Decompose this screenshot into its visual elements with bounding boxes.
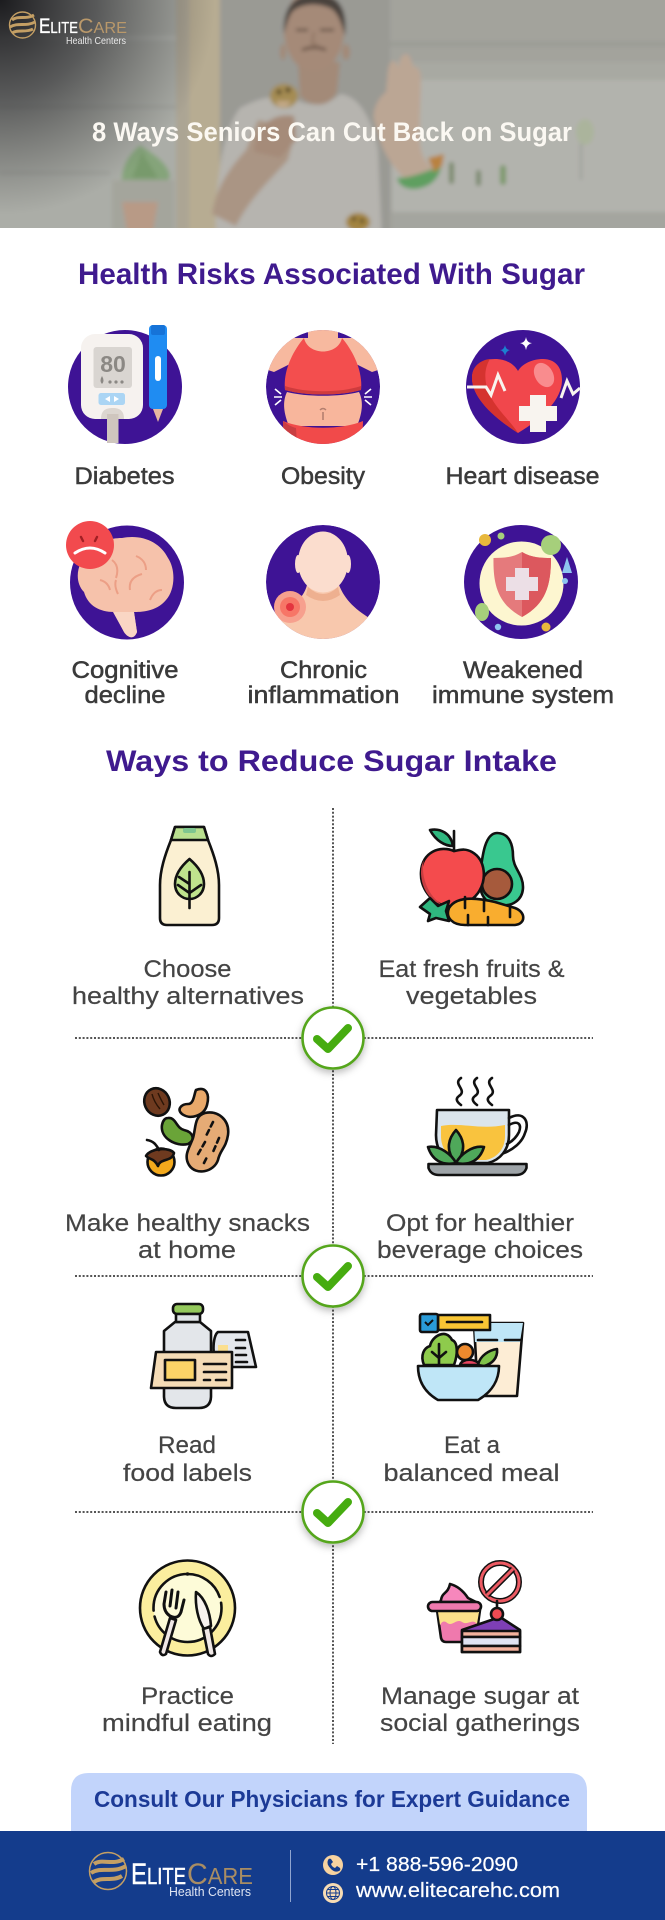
heading: ways to reduce: Ways to Reduce Sugar Intake [106,745,557,778]
icon: balanced meal bowl [418,1314,523,1400]
label: cognitive decline [72,657,178,709]
plant [122,145,170,188]
label: weakened immune system [432,657,614,709]
logo wordmark care: CARE [78,15,127,38]
label: choose healthy alternatives: Choose [144,956,232,983]
website: www.elitecarehc.com [355,1880,560,1902]
label: obesity: Obesity [281,463,365,490]
label: weakened immune system: immune system [432,682,614,709]
heading: health risks: Health Risks Associated With Sugar [78,258,586,291]
icon: healthy alternatives bottle [160,827,219,925]
shirt [216,94,382,240]
hero logo [10,12,127,47]
neck [298,62,340,105]
label: opt for healthier beverage choices: Opt for healthier [386,1210,574,1237]
label: read food labels: food labels [123,1460,252,1487]
icon: sugar at gatherings desserts [428,1563,520,1652]
label: practice mindful eating: mindful eating [102,1710,272,1737]
label: opt for healthier beverage choices: beverage choices [377,1237,583,1264]
logo swirl [10,12,36,38]
footer band [0,1831,665,1920]
label: choose healthy alternatives [72,956,304,1010]
label: read food labels [123,1432,252,1487]
label: make healthy snacks at home: Make healthy snacks [65,1210,310,1237]
head [284,0,344,72]
label: eat a balanced meal: Eat a [444,1432,501,1459]
label: heart disease: Heart disease [446,463,600,490]
hero photo banner [0,0,665,242]
label: make healthy snacks at home [65,1210,310,1264]
label: chronic inflammation [248,657,400,709]
icon: phone [323,1855,343,1875]
label: eat a balanced meal: balanced meal [384,1460,560,1487]
icon: brain with sad face [66,521,184,640]
logo swirl [90,1852,126,1890]
footer logo [90,1852,253,1899]
tagline: Health Centers [169,1884,251,1899]
label: weakened immune system: Weakened [463,657,583,684]
label: manage sugar at social gatherings: social gatherings [380,1710,580,1737]
label: opt for healthier beverage choices [377,1210,583,1264]
icon: check mark 3 [302,1482,364,1542]
callout text: Consult Our Physicians for Expert Guidance [94,1786,570,1812]
label: practice mindful eating [102,1683,272,1737]
phone number: +1 888-596-2090 [356,1854,518,1876]
icon: mindful eating plate [140,1560,235,1656]
panel: health risks grid [66,325,614,709]
web contact [323,1880,560,1903]
icon: weakened immune system shield [464,525,578,639]
green bowl with carrot [397,166,441,189]
logo wordmark: ELITE [39,15,78,38]
icon: heart disease [466,330,580,444]
label: make healthy snacks at home: at home [138,1237,236,1264]
icon: diabetes glucose meter: 80 [100,351,126,377]
cookie in hand [270,84,298,108]
icon: globe [323,1883,343,1903]
label: manage sugar at social gatherings: Manage sugar at [381,1683,579,1710]
icon: diabetes glucose meter [68,325,182,444]
label: cognitive decline: decline [84,682,166,709]
label: cognitive decline: Cognitive [72,657,178,684]
kitchen bottles [449,162,454,184]
label: eat fresh fruits and vegetables [378,956,564,1010]
logo tagline: Health Centers [66,35,126,47]
left arm [212,120,296,226]
label: eat fresh fruits and vegetables: vegetables [406,983,537,1010]
label: eat a balanced meal [384,1432,560,1487]
icon: healthy snacks nuts [140,1084,228,1176]
title: 8 Ways Seniors Can Cut Back on Sugar [92,117,572,147]
label: chronic inflammation: inflammation [248,682,400,709]
raised hand and forearm [374,54,434,178]
wordmark elite: ELITE [131,1858,186,1891]
phone contact [323,1854,518,1876]
icon: food label bottle [151,1304,256,1408]
label: diabetes: Diabetes [74,463,174,490]
label: read food labels: Read [158,1432,216,1459]
label: eat fresh fruits and vegetables: Eat fresh fruits & [378,956,564,983]
falling cookie [346,213,370,231]
icon: check mark 2 [302,1246,364,1306]
icon: obesity torso [266,330,380,444]
label: manage sugar at social gatherings [380,1683,580,1737]
wordmark care: CARE [187,1858,253,1891]
panel: ways to reduce sugar [65,808,593,1744]
label: chronic inflammation: Chronic [280,657,367,684]
icon: fresh fruits and vegetables [420,830,523,925]
icon: healthier beverages tea cup [428,1078,527,1175]
dark corner gradient [0,0,204,202]
photo: senior man refusing a cookie [0,0,665,242]
icon: chronic inflammation [266,525,380,650]
label: choose healthy alternatives: healthy alternatives [72,983,304,1010]
callout: consult physicians [71,1773,587,1831]
label: practice mindful eating: Practice [141,1683,234,1710]
icon: check mark 1 [302,1008,364,1068]
